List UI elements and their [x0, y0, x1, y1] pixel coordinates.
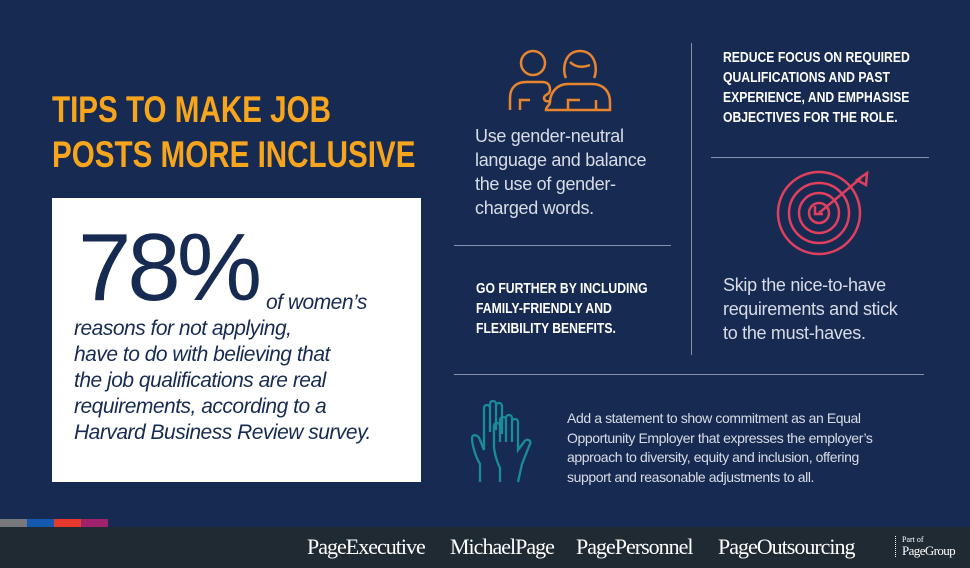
footer: MichaelPage: [450, 534, 554, 559]
stat text: Harvard Business Review survey.: [74, 421, 371, 444]
text: equal opportunity: approach to diversity, equity and inclusion, offering: [567, 449, 859, 465]
stat text: the job qualifications are real: [74, 369, 326, 392]
text: skip: [723, 275, 898, 343]
text: gender-neutral: language and balance: [475, 150, 646, 170]
logos: PageExecutive: [307, 534, 425, 559]
text: skip: requirements and stick: [723, 299, 897, 319]
stat text: requirements, according to a: [74, 395, 326, 418]
text: go further: [476, 281, 648, 337]
text: skip: to the must-haves.: [723, 323, 866, 343]
footer: PagePersonnel: [576, 534, 693, 559]
color strip: [0, 519, 108, 527]
stat text: of women’s: [266, 291, 367, 314]
text: reduce focus: [723, 50, 910, 126]
text: gender-neutral: Use gender-neutral: [475, 126, 624, 146]
footer: PageGroup: [902, 543, 955, 558]
text: reduce focus: QUALIFICATIONS AND PAST: [723, 70, 890, 86]
text: reduce focus: REDUCE FOCUS ON REQUIRED: [723, 50, 910, 66]
title: TIPS TO MAKE JOB: [52, 89, 331, 130]
stat box: [52, 198, 421, 482]
stat number: 78%: [78, 214, 258, 321]
icon: hands: [470, 400, 532, 482]
footer: [0, 527, 970, 568]
text: go further: FAMILY-FRIENDLY AND: [476, 301, 612, 317]
footer: PageOutsourcing: [718, 534, 855, 559]
text: skip: Skip the nice-to-have: [723, 275, 886, 295]
text: go further: GO FURTHER BY INCLUDING: [476, 281, 648, 297]
text: equal opportunity: support and reasonable adjustments to all.: [567, 468, 814, 484]
title: [52, 89, 415, 175]
text: equal opportunity: Add a statement to show commitment as an Equal: [567, 410, 861, 426]
icon: people: [508, 50, 612, 112]
footer: Part of: [902, 535, 924, 544]
text: gender-neutral: the use of gender-: [475, 174, 616, 194]
stat text: reasons for not applying,: [74, 317, 291, 340]
icon: target: [776, 170, 868, 256]
text: gender-neutral: [475, 126, 646, 218]
text: go further: FLEXIBILITY BENEFITS.: [476, 321, 616, 337]
text: equal opportunity: Opportunity Employer that expresses the employer’s: [567, 430, 873, 446]
text: reduce focus: EXPERIENCE, AND EMPHASISE: [723, 90, 909, 106]
text: equal opportunity: [567, 410, 873, 485]
stat text: have to do with believing that: [74, 343, 330, 366]
text: gender-neutral: charged words.: [475, 198, 594, 218]
title: POSTS MORE INCLUSIVE: [52, 134, 415, 175]
text: reduce focus: OBJECTIVES FOR THE ROLE.: [723, 110, 898, 126]
stat text: [74, 291, 371, 444]
